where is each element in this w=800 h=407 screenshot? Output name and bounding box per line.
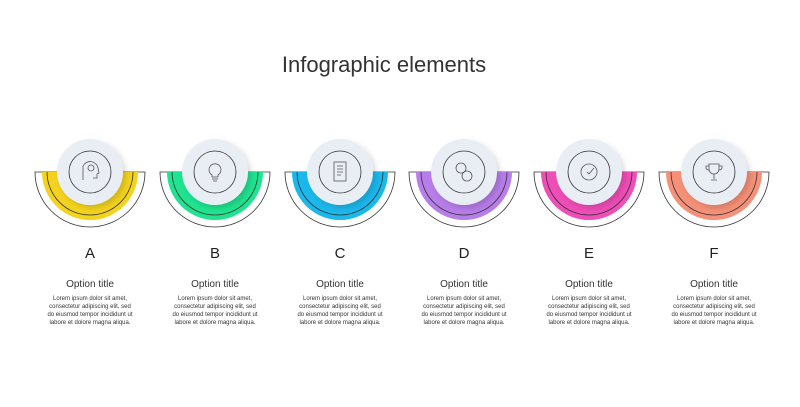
item E: E [584,245,594,262]
item C: Lorem ipsum dolor sit amet, [303,296,377,302]
icon: clock [581,164,597,180]
item A: consectetur adipiscing elit, sed [49,304,131,310]
item F: labore et dolore magna aliqua. [673,320,755,326]
item B: Option title [191,279,239,290]
item E: labore et dolore magna aliqua. [548,320,630,326]
item E [534,139,644,326]
item E: consectetur adipiscing elit, sed [548,304,630,310]
item B: Lorem ipsum dolor sit amet, [178,296,252,302]
item D: do eiusmod tempor incididunt ut [421,312,507,318]
item C: Option title [316,279,364,290]
icon: head gear [83,162,99,180]
item F: consectetur adipiscing elit, sed [673,304,755,310]
item D: Lorem ipsum dolor sit amet, [427,296,501,302]
item E: Lorem ipsum dolor sit amet, [552,296,626,302]
item F: F [709,245,719,262]
item B: do eiusmod tempor incididunt ut [172,312,258,318]
item D: consectetur adipiscing elit, sed [423,304,505,310]
item A: do eiusmod tempor incididunt ut [47,312,133,318]
icon: coins [456,163,472,181]
item A [35,139,145,326]
item C: labore et dolore magna aliqua. [299,320,381,326]
icon: trophy [706,164,722,180]
item D [409,139,519,326]
item B: labore et dolore magna aliqua. [174,320,256,326]
item B: consectetur adipiscing elit, sed [174,304,256,310]
item F [659,139,769,326]
item A: labore et dolore magna aliqua. [49,320,131,326]
item B [160,139,270,326]
item F: Option title [690,279,738,290]
icon: document [334,162,346,181]
item E: Option title [565,279,613,290]
item D: Option title [440,279,488,290]
item A: Option title [66,279,114,290]
item C: C [335,245,346,262]
item C: do eiusmod tempor incididunt ut [297,312,383,318]
item E: do eiusmod tempor incididunt ut [546,312,632,318]
item D: D [459,245,470,262]
title: Infographic elements [282,52,486,77]
item D: labore et dolore magna aliqua. [423,320,505,326]
item A: Lorem ipsum dolor sit amet, [53,296,127,302]
item B: B [210,245,220,262]
item F: Lorem ipsum dolor sit amet, [677,296,751,302]
item A: A [85,245,95,262]
item C [285,139,395,326]
item C: consectetur adipiscing elit, sed [299,304,381,310]
icon: bulb [209,164,221,181]
item F: do eiusmod tempor incididunt ut [671,312,757,318]
